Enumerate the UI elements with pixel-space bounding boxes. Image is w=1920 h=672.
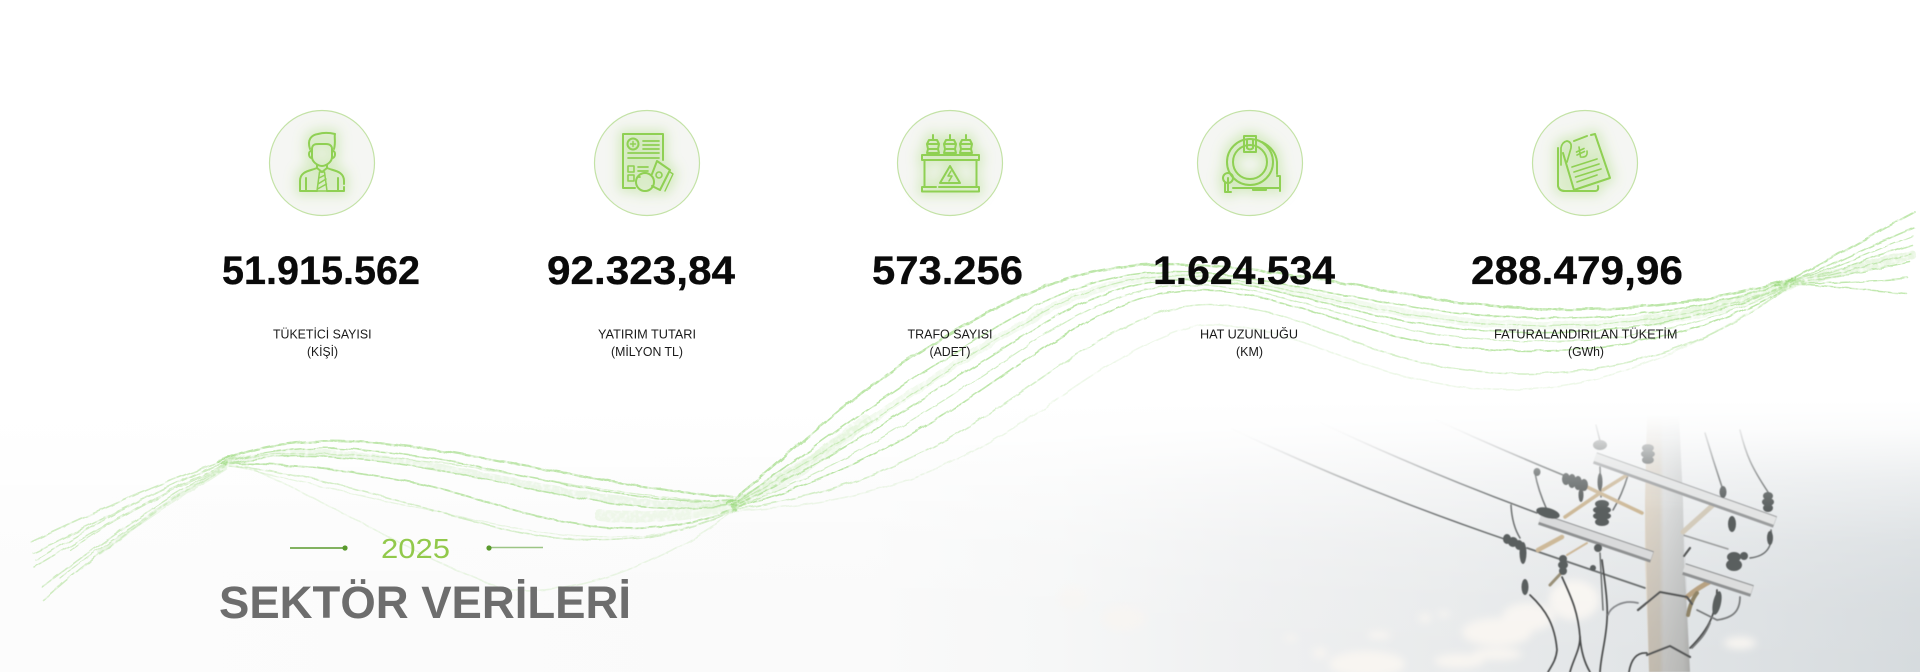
hanging cables	[1530, 560, 1740, 672]
label: (KM)	[1236, 344, 1263, 359]
label: (ADET)	[930, 344, 970, 359]
icon: person in circle	[270, 110, 374, 216]
pole shading	[1646, 532, 1690, 672]
short wires	[1511, 425, 1771, 610]
label: (GWh)	[1568, 344, 1604, 359]
stat: investment	[547, 110, 736, 359]
braces	[1538, 475, 1713, 615]
icon: measuring tape	[1198, 110, 1302, 216]
label	[273, 326, 372, 359]
icon: transformer	[898, 110, 1002, 216]
green wave ribbon	[31, 212, 1915, 600]
label	[598, 326, 696, 359]
value: 573.256	[872, 249, 1023, 293]
wave: left hump	[218, 441, 745, 590]
sky gradient	[0, 380, 1920, 672]
stat: transformers	[872, 110, 1023, 359]
value: 92.323,84	[547, 249, 736, 293]
overhead wires	[1268, 433, 1564, 540]
value: 288.479,96	[1471, 249, 1683, 293]
white fade over sky	[0, 380, 1920, 672]
pole	[1645, 415, 1690, 672]
crossarms	[1540, 457, 1775, 591]
label	[908, 326, 992, 359]
value: 51.915.562	[222, 249, 420, 293]
value: 1.624.534	[1153, 249, 1336, 293]
label: (KİŞİ)	[307, 344, 338, 359]
label: HAT UZUNLUĞU	[1200, 326, 1298, 342]
stat: billed consumption	[1471, 110, 1683, 359]
icon: bill with clip	[1532, 110, 1638, 216]
heading: year with lines: 2025	[381, 533, 450, 564]
label: TÜKETİCİ SAYISI	[273, 326, 372, 342]
label: TRAFO SAYISI	[908, 326, 992, 342]
wave: left fan	[31, 455, 240, 600]
pole, arms and wires	[1268, 425, 1778, 672]
heading: title: SEKTÖR VERİLERİ	[219, 577, 631, 628]
wave: middle hump to right convergence	[728, 265, 1795, 511]
pole band clamps	[1638, 548, 1692, 657]
wave: right fan	[1776, 212, 1915, 294]
stat: consumers	[222, 110, 420, 359]
stat: line length	[1153, 110, 1336, 359]
photo: power pole against hazy sky	[1009, 424, 1920, 672]
insulators	[1503, 440, 1774, 616]
label	[1200, 326, 1298, 359]
label	[1494, 326, 1678, 359]
label: YATIRIM TUTARI	[598, 326, 696, 342]
clouds	[1058, 580, 1756, 672]
label: FATURALANDIRILAN TÜKETİM	[1494, 326, 1678, 342]
label: (MİLYON TL)	[611, 344, 683, 359]
icon: document with money	[594, 110, 700, 216]
heading: year with lines	[290, 533, 543, 564]
